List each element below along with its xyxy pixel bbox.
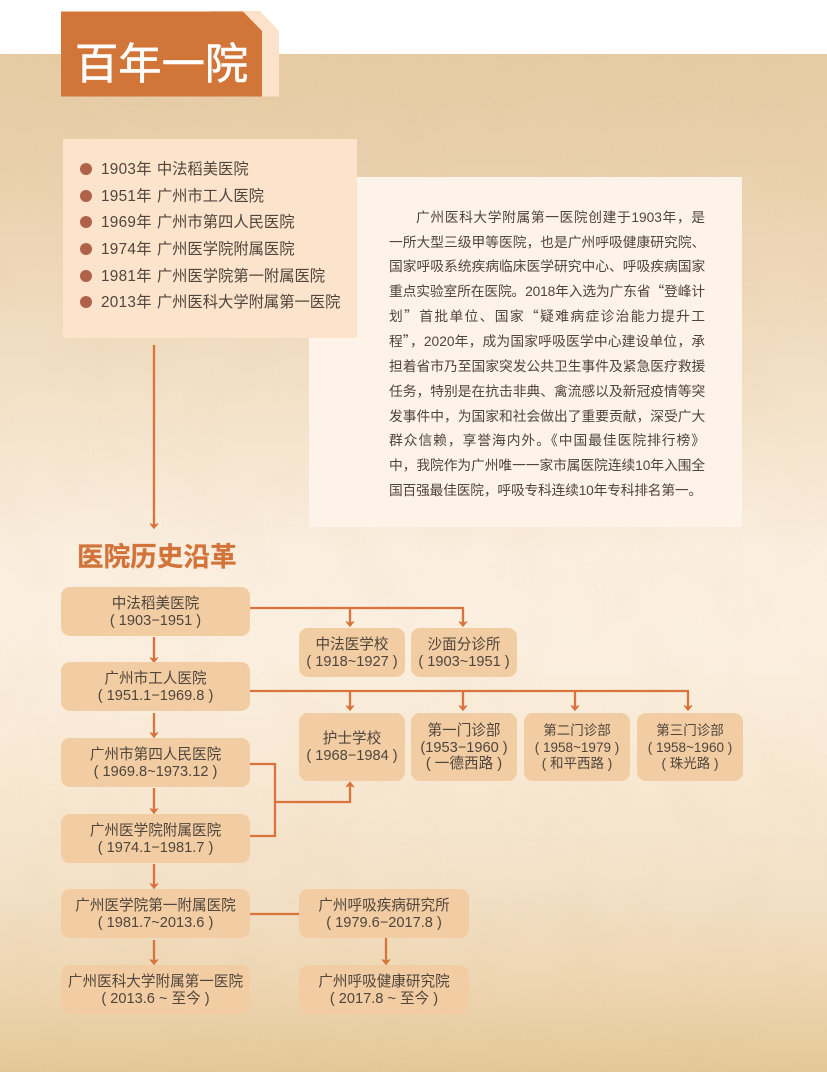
box: 第三门诊部: 第三门诊部 bbox=[656, 723, 724, 738]
box: 广州医学院附属医院 bbox=[61, 814, 250, 863]
box: 广州呼吸疾病研究所: ( 1979.6−2017.8 ) bbox=[326, 914, 442, 930]
box: 第三门诊部: ( 1958~1960 ) bbox=[648, 740, 732, 755]
box: 中法医学校 bbox=[299, 628, 405, 677]
title text: 百年一院 bbox=[75, 41, 248, 89]
item 1: 1903年 中法稻美医院 bbox=[101, 161, 249, 178]
box: 广州市工人医院 bbox=[61, 662, 250, 711]
panel: timeline list bbox=[63, 139, 357, 338]
bullet 3 bbox=[80, 216, 92, 228]
box: 广州呼吸疾病研究所 bbox=[299, 889, 469, 938]
introduction text: 中，我院作为广州唯一一家市属医院连续10年入围全 bbox=[389, 458, 705, 473]
bullet 4 bbox=[80, 243, 92, 255]
item 2: 1951年 广州市工人医院 bbox=[101, 188, 264, 205]
bullet 5 bbox=[80, 270, 92, 282]
box: 护士学校: ( 1968−1984 ) bbox=[306, 748, 398, 764]
box: 护士学校 bbox=[299, 713, 405, 781]
box: 广州医学院附属医院: 广州医学院附属医院 bbox=[90, 822, 221, 838]
box: 沙面分诊所 bbox=[411, 628, 517, 677]
box: 广州市第四人民医院 bbox=[61, 738, 250, 787]
box: 第一门诊部 bbox=[411, 713, 517, 781]
box: 第三门诊部 bbox=[637, 713, 743, 781]
box: 广州呼吸健康研究院: 广州呼吸健康研究院 bbox=[318, 974, 450, 990]
introduction text: 群众信赖，享誉海内外。《中国最佳医院排行榜》 bbox=[389, 433, 705, 448]
introduction text: 一所大型三级甲等医院，也是广州呼吸健康研究院、 bbox=[389, 235, 705, 250]
box: 广州医学院附属医院: ( 1974.1−1981.7 ) bbox=[98, 840, 213, 856]
item 5: 1981年 广州医学院第一附属医院 bbox=[101, 268, 325, 285]
box: 广州医科大学附属第一医院: 广州医科大学附属第一医院 bbox=[68, 974, 243, 990]
box: 中法医学校: ( 1918~1927 ) bbox=[306, 654, 398, 670]
introduction text: 发事件中，为国家和社会做出了重要贡献，深受广大 bbox=[389, 409, 705, 424]
box: 广州呼吸健康研究院: ( 2017.8 ~ 至今 ) bbox=[330, 990, 438, 1006]
heading: hospital history: 医院历史沿革 bbox=[77, 542, 237, 572]
box: 广州医学院第一附属医院 bbox=[61, 889, 250, 938]
box: 沙面分诊所: 沙面分诊所 bbox=[428, 636, 500, 652]
introduction text: 重点实验室所在医院。2018年入选为广东省“登峰计 bbox=[389, 280, 705, 300]
box: 广州市第四人民医院: 广州市第四人民医院 bbox=[90, 746, 221, 762]
box: 广州呼吸疾病研究所: 广州呼吸疾病研究所 bbox=[318, 898, 450, 914]
box: 护士学校: 护士学校 bbox=[323, 731, 381, 747]
introduction text bbox=[389, 210, 705, 498]
box: 第三门诊部: ( 珠光路 ) bbox=[662, 756, 718, 771]
box: 中法稻美医院 bbox=[61, 587, 250, 636]
introduction text: 程”，2020年，成为国家呼吸医学中心建设单位，承 bbox=[389, 330, 705, 350]
box: 广州医科大学附属第一医院 bbox=[61, 965, 250, 1014]
box: 第二门诊部: ( 1958~1979 ) bbox=[535, 740, 619, 755]
box: 广州市工人医院: ( 1951.1−1969.8 ) bbox=[98, 688, 213, 704]
title tab bbox=[61, 11, 279, 96]
panel: introduction bbox=[309, 177, 742, 527]
box: 中法医学校: 中法医学校 bbox=[316, 636, 388, 652]
introduction text: 担着省市乃至国家突发公共卫生事件及紧急医疗救援 bbox=[389, 359, 705, 374]
box: 第二门诊部: ( 和平西路 ) bbox=[542, 756, 612, 771]
box: 第一门诊部: 第一门诊部 bbox=[428, 723, 500, 739]
introduction text: 任务，特别是在抗击非典、禽流感以及新冠疫情等突 bbox=[389, 384, 705, 399]
introduction text: 国家呼吸系统疾病临床医学研究中心、呼吸疾病国家 bbox=[389, 259, 705, 274]
box: 第一门诊部: (1953−1960 ) bbox=[420, 740, 508, 756]
box: 中法稻美医院: 中法稻美医院 bbox=[112, 596, 199, 612]
box: 第二门诊部 bbox=[524, 713, 630, 781]
box: 沙面分诊所: ( 1903~1951 ) bbox=[418, 654, 510, 670]
bullet 6 bbox=[80, 296, 92, 308]
box: 广州市工人医院: 广州市工人医院 bbox=[104, 670, 207, 686]
box: 中法稻美医院: ( 1903−1951 ) bbox=[110, 612, 201, 628]
box: 广州呼吸健康研究院 bbox=[299, 965, 469, 1014]
introduction text: 划”首批单位、国家“疑难病症诊治能力提升工 bbox=[389, 305, 705, 325]
item 6: 2013年 广州医科大学附属第一医院 bbox=[101, 294, 340, 311]
box: 第一门诊部: ( 一德西路 ) bbox=[426, 756, 502, 772]
box: 广州市第四人民医院: ( 1969.8~1973.12 ) bbox=[94, 764, 217, 780]
item 3: 1969年 广州市第四人民医院 bbox=[101, 214, 295, 231]
introduction text: 广州医科大学附属第一医院创建于1903年，是 bbox=[416, 210, 705, 225]
box: 广州医学院第一附属医院: 广州医学院第一附属医院 bbox=[75, 898, 236, 914]
bullet 2 bbox=[80, 190, 92, 202]
box: 广州医学院第一附属医院: ( 1981.7~2013.6 ) bbox=[98, 914, 213, 930]
box: 第二门诊部: 第二门诊部 bbox=[543, 723, 611, 738]
box: 广州医科大学附属第一医院: ( 2013.6 ~ 至今 ) bbox=[101, 990, 210, 1006]
introduction text: 国百强最佳医院，呼吸专科连续10年专科排名第一。 bbox=[389, 483, 702, 498]
bullet 1 bbox=[80, 163, 92, 175]
item 4: 1974年 广州医学院附属医院 bbox=[101, 241, 295, 258]
